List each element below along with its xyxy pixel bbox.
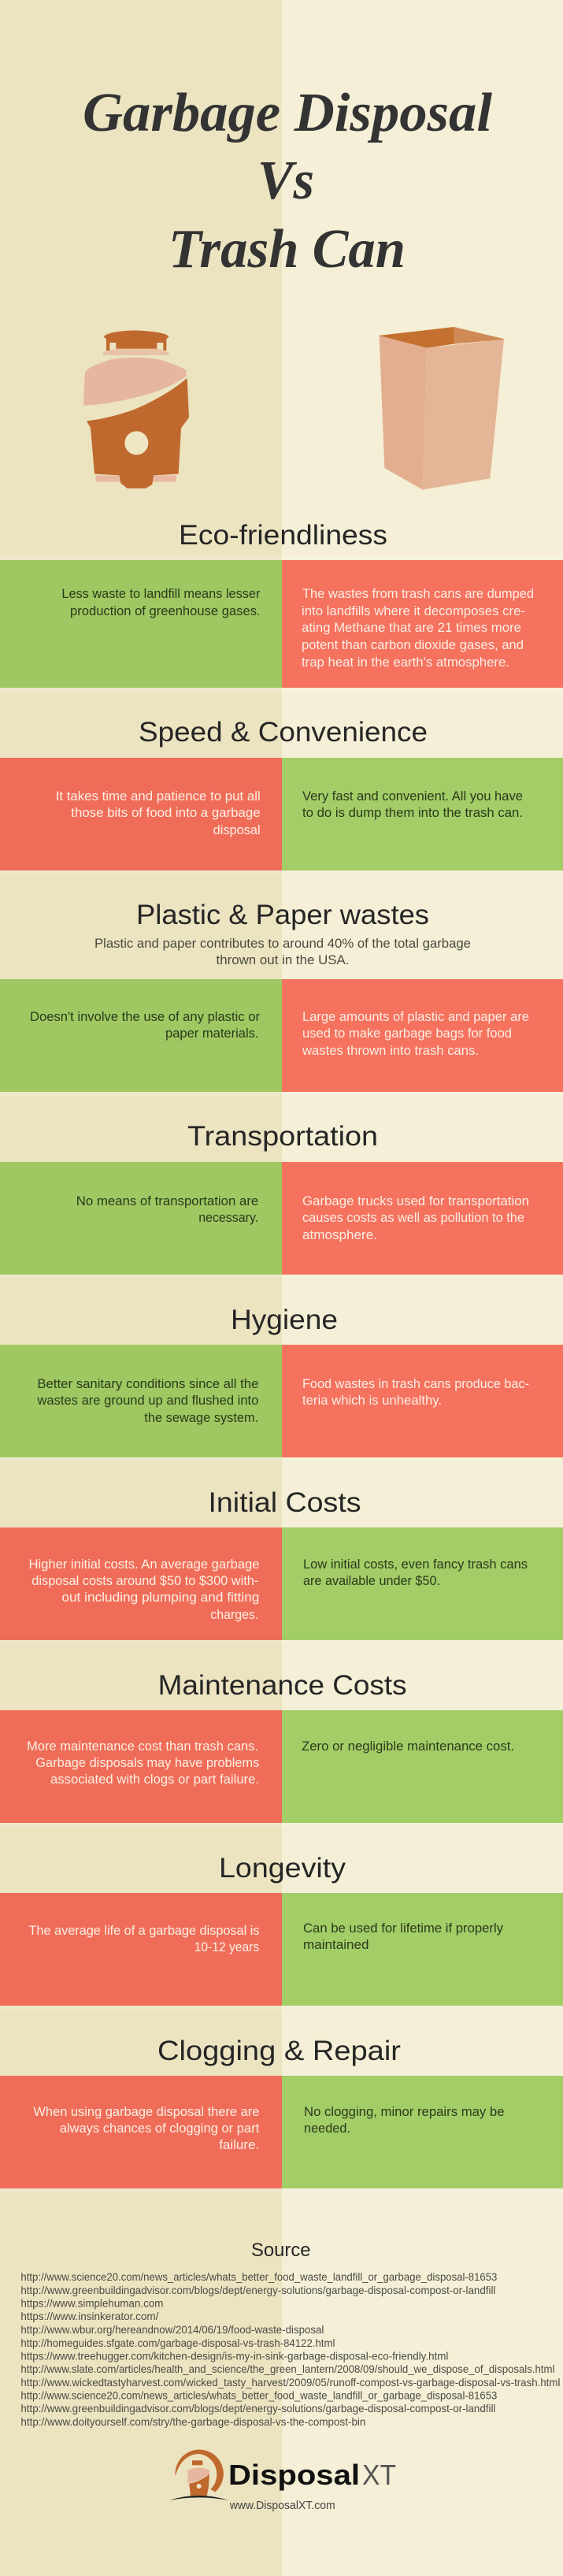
- panel: trash can plastic: Large amounts of plastic and paper are: [302, 1009, 529, 1024]
- panel: disposal speed: those bits of food into a garbage: [71, 805, 261, 820]
- section: maintenance costs: [0, 1670, 563, 1823]
- heading: Plastic & Paper wastes: [136, 900, 429, 930]
- subheading: [94, 936, 471, 967]
- panel: trash can transportation: [282, 1162, 563, 1275]
- section: hygiene: [0, 1305, 563, 1457]
- panel: trash can longevity: [282, 1893, 563, 2006]
- panel: disposal longevity: The average life of a garbage disposal is: [28, 1923, 260, 1938]
- subheading: thrown out in the USA.: [216, 952, 350, 967]
- heading: Initial Costs: [208, 1487, 361, 1518]
- panel: disposal plastic: Doesn't involve the use of any plastic or: [30, 1009, 260, 1024]
- source list: http://www.doityourself.com/stry/the-garbage-disposal-vs-the-compost-bin: [20, 2415, 365, 2428]
- panel: disposal eco-friendliness: Less waste to landfill means lesser: [61, 586, 261, 601]
- icon: trash can: [379, 327, 506, 490]
- panel: disposal eco-friendliness: [0, 560, 282, 688]
- panel: trash can maintenance: [282, 1710, 563, 1823]
- panel: disposal initial costs: Higher initial costs. An average garbage: [28, 1557, 260, 1572]
- source list: http://www.science20.com/news_articles/whats_better_food_waste_landfill_or_garbage_disposal-81653: [20, 2270, 498, 2283]
- heading: Longevity: [219, 1853, 346, 1884]
- panel: trash can eco-friendliness: into landfills where it decomposes cre-: [302, 603, 525, 618]
- logo wordmark: Disposal: [228, 2459, 360, 2491]
- heading: Eco-friendliness: [179, 520, 387, 551]
- section: speed and convenience: [0, 717, 563, 870]
- panel: trash can speed: [282, 758, 563, 870]
- panel: disposal hygiene: the sewage system.: [144, 1410, 258, 1425]
- panel: disposal maintenance: associated with clogs or part failure.: [50, 1772, 259, 1787]
- panel: trash can hygiene: Food wastes in trash cans produce bac-: [302, 1376, 529, 1391]
- panel: trash can clogging: No clogging, minor repairs may be: [304, 2104, 504, 2119]
- panel: trash can hygiene: teria which is unhealthy.: [302, 1393, 442, 1408]
- panel: trash can eco-friendliness: trap heat in the earth's atmosphere.: [302, 655, 509, 670]
- source list: http://www.greenbuildingadvisor.com/blogs/dept/energy-solutions/garbage-disposal-compost-or-landfill: [20, 2402, 495, 2415]
- panel: disposal maintenance: More maintenance cost than trash cans.: [27, 1739, 258, 1754]
- panel: disposal transportation: No means of transportation are: [76, 1193, 258, 1208]
- panel: trash can initial costs: [282, 1527, 563, 1640]
- title: Trash Can: [169, 219, 406, 280]
- panel: disposal eco-friendliness: production of greenhouse gases.: [70, 603, 261, 618]
- heading: Speed & Convenience: [139, 717, 428, 748]
- logo: DisposalXT: [169, 2450, 396, 2512]
- panel: disposal clogging: failure.: [219, 2137, 259, 2152]
- logo wordmark suffix: XT: [362, 2459, 396, 2491]
- panel: trash can clogging: needed.: [304, 2121, 350, 2136]
- source list: http://www.wbur.org/hereandnow/2014/06/19/food-waste-disposal: [20, 2323, 324, 2336]
- panel: disposal hygiene: [0, 1345, 282, 1457]
- panel: trash can speed: to do is dump them into the trash can.: [302, 805, 523, 820]
- section: eco-friendliness: [0, 520, 563, 688]
- panel: disposal speed: disposal: [213, 822, 261, 837]
- panel: trash can plastic: wastes thrown into trash cans.: [302, 1043, 479, 1058]
- panel: trash can plastic: used to make garbage bags for food: [302, 1026, 512, 1041]
- section: longevity: [0, 1853, 563, 2006]
- heading: Transportation: [187, 1121, 378, 1152]
- panel: trash can initial costs: are available under $50.: [303, 1573, 440, 1588]
- panel: trash can transportation: atmosphere.: [302, 1227, 377, 1242]
- panel: disposal speed: [0, 758, 282, 870]
- title: Garbage Disposal: [83, 83, 493, 143]
- panel: disposal longevity: [0, 1893, 282, 2006]
- panel: disposal initial costs: [0, 1527, 282, 1640]
- panel: disposal initial costs: disposal costs around $50 to $300 with-: [31, 1573, 258, 1588]
- panel: trash can eco-friendliness: [282, 560, 563, 688]
- panel: disposal maintenance: [0, 1710, 282, 1823]
- source list: https://www.simplehuman.com: [20, 2297, 163, 2310]
- icon: logo mark: [169, 2450, 229, 2500]
- panel: trash can hygiene: [282, 1345, 563, 1457]
- panel: disposal longevity: 10-12 years: [194, 1939, 259, 1954]
- panel: trash can maintenance: Zero or negligible maintenance cost.: [302, 1739, 514, 1754]
- section: plastic and paper wastes: [0, 900, 563, 1092]
- panel: trash can initial costs: Low initial costs, even fancy trash cans: [303, 1557, 528, 1572]
- section: initial costs: [0, 1487, 563, 1640]
- panel: disposal clogging: always chances of clogging or part: [60, 2121, 259, 2136]
- source list: [20, 2270, 560, 2428]
- panel: trash can eco-friendliness: ating Methane that are 21 times more: [302, 620, 521, 635]
- panel: disposal plastic: paper materials.: [165, 1026, 258, 1041]
- source list: http://www.greenbuildingadvisor.com/blogs/dept/energy-solutions/garbage-disposal-compost-or-landfill: [20, 2284, 495, 2296]
- title: [83, 83, 493, 280]
- panel: trash can eco-friendliness: potent than carbon dioxide gases, and: [302, 637, 524, 652]
- panel: trash can plastic: [282, 979, 563, 1092]
- subheading: Plastic and paper contributes to around 40% of the total garbage: [94, 936, 471, 951]
- panel: trash can longevity: maintained: [303, 1937, 369, 1952]
- icon: garbage disposal: [83, 330, 189, 488]
- heading: Clogging & Repair: [157, 2036, 401, 2066]
- panel: trash can transportation: Garbage trucks used for transportation: [302, 1193, 529, 1208]
- panel: disposal clogging: When using garbage disposal there are: [33, 2104, 259, 2119]
- panel: disposal clogging: [0, 2076, 282, 2188]
- section: clogging and repair: [0, 2036, 563, 2188]
- panel: disposal hygiene: wastes are ground up and flushed into: [36, 1393, 258, 1408]
- panel: disposal maintenance: Garbage disposals may have problems: [35, 1755, 259, 1770]
- panel: disposal transportation: necessary.: [198, 1210, 258, 1225]
- section: transportation: [0, 1121, 563, 1275]
- panel: trash can clogging: [282, 2076, 563, 2188]
- source list: https://www.treehugger.com/kitchen-design/is-my-in-sink-garbage-disposal-eco-friendly.html: [20, 2349, 448, 2362]
- heading: Maintenance Costs: [158, 1670, 407, 1701]
- panel: disposal speed: It takes time and patience to put all: [56, 789, 261, 804]
- website url: www.DisposalXT.com: [229, 2500, 335, 2512]
- source list: https://www.insinkerator.com/: [20, 2310, 158, 2322]
- source list: http://homeguides.sfgate.com/garbage-disposal-vs-trash-84122.html: [20, 2337, 335, 2349]
- panel: trash can transportation: causes costs as well as pollution to the: [302, 1210, 524, 1225]
- panel: disposal initial costs: charges.: [210, 1607, 258, 1622]
- title: Vs: [257, 150, 314, 211]
- panel: disposal transportation: [0, 1162, 282, 1275]
- panel: trash can longevity: Can be used for lifetime if properly: [303, 1921, 503, 1936]
- panel: disposal initial costs: out including plumping and fitting: [61, 1590, 259, 1605]
- panel: disposal hygiene: Better sanitary conditions since all the: [37, 1376, 258, 1391]
- panel: trash can speed: Very fast and convenient. All you have: [302, 789, 523, 804]
- source heading: Source: [251, 2240, 310, 2261]
- panel: disposal plastic: [0, 979, 282, 1092]
- heading: Hygiene: [231, 1305, 338, 1335]
- panel: trash can eco-friendliness: The wastes from trash cans are dumped: [302, 586, 534, 601]
- source list: http://www.science20.com/news_articles/whats_better_food_waste_landfill_or_garbage_disposal-81653: [20, 2389, 498, 2401]
